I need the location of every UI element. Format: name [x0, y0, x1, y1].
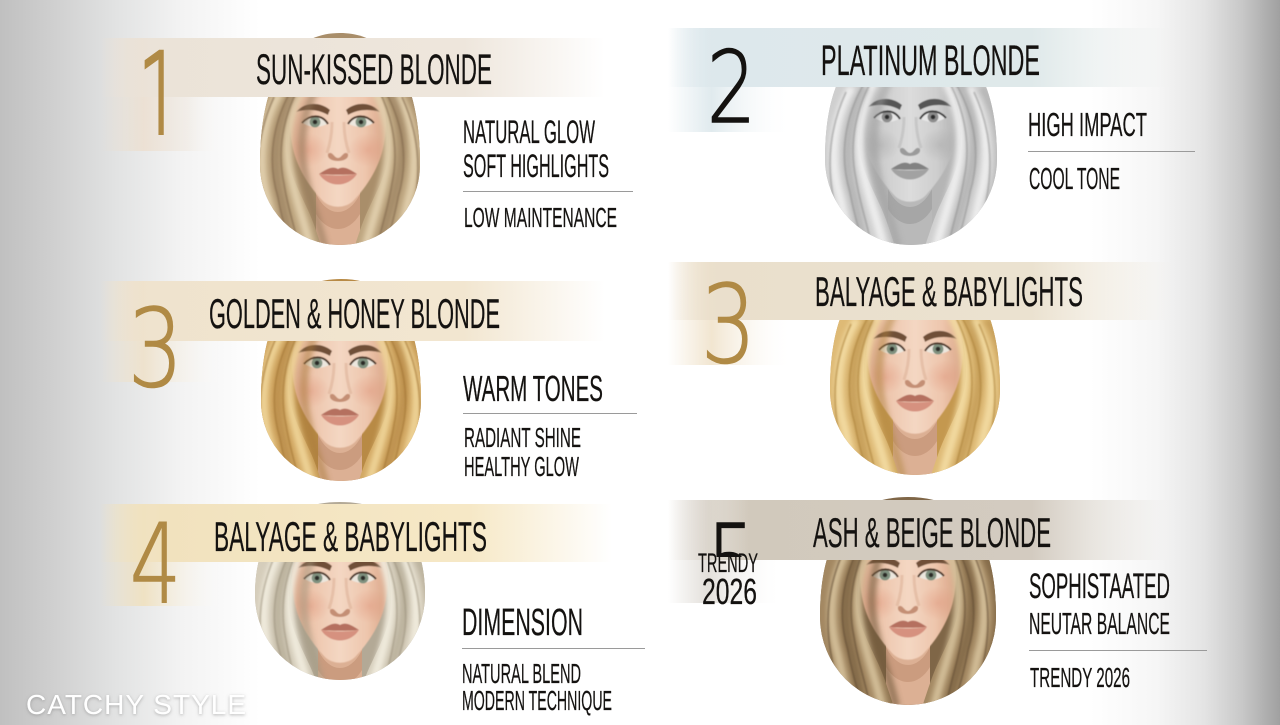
number 5: 5 — [707, 501, 757, 629]
number backdrop 3 — [100, 281, 225, 382]
panel: sun-kissed blonde — [100, 28, 633, 254]
banner — [668, 262, 1173, 320]
feature text: DIMENSION — [462, 602, 583, 644]
number backdrop 2 — [668, 28, 793, 132]
number 1: 1 — [138, 28, 182, 172]
banner — [668, 500, 1173, 560]
heading: GOLDEN & HONEY BLONDE — [209, 290, 500, 337]
feature text — [463, 368, 637, 482]
feature text: COOL TONE — [1029, 161, 1120, 196]
heading: PLATINUM BLONDE — [821, 37, 1040, 85]
feature text: HIGH IMPACT — [1028, 106, 1147, 143]
number 3: 3 — [128, 287, 183, 412]
number 2: 2 — [707, 31, 756, 146]
trendy overlay label: TRENDY — [698, 548, 758, 578]
feature text — [462, 602, 645, 716]
banner — [100, 281, 605, 341]
feature text: LOW MAINTENANCE — [464, 202, 617, 233]
number 4: 4 — [130, 500, 181, 628]
feature text: TRENDY 2026 — [1030, 662, 1130, 693]
heading: BALYAGE & BABYLIGHTS — [214, 513, 487, 560]
number 3 right: 3 — [701, 263, 756, 388]
feature text: NATURAL BLEND — [462, 658, 581, 689]
feature text: RADIANT SHINE — [464, 422, 581, 453]
number backdrop 4 — [100, 504, 225, 606]
banner — [100, 38, 605, 97]
feature text: HEALTHY GLOW — [464, 451, 579, 482]
panel: platinum blonde — [668, 28, 1195, 250]
banner — [668, 28, 1173, 87]
panel: balyage and babylights right — [672, 262, 1142, 475]
feature text: WARM TONES — [463, 368, 603, 409]
portrait: balyage platinum beige — [255, 502, 425, 680]
number backdrop 1 — [100, 38, 225, 151]
feature text: SOFT HIGHLIGHTS — [463, 148, 609, 184]
trendy overlay label — [698, 548, 758, 612]
panel: golden and honey blonde — [100, 275, 637, 495]
portrait: sun-kissed blonde — [260, 33, 420, 245]
portrait: balyage wavy — [830, 320, 1000, 475]
feature text: MODERN TECHNIQUE — [462, 685, 612, 716]
trendy overlay label: 2026 — [702, 571, 757, 612]
feature text — [1029, 567, 1207, 693]
portrait: golden and honey blonde — [261, 279, 421, 481]
banner — [100, 504, 612, 562]
feature text — [1028, 106, 1195, 196]
heading: ASH & BEIGE BLONDE — [813, 509, 1051, 556]
portrait: platinum blonde — [825, 87, 997, 245]
portrait: ash and beige blonde — [820, 497, 996, 705]
panel: balyage and babylights left — [100, 500, 645, 716]
panel: ash and beige blonde — [668, 495, 1207, 710]
watermark: CATCHY STYLE — [26, 689, 246, 720]
feature text — [463, 114, 633, 233]
number backdrop 3 right — [668, 262, 793, 365]
heading: SUN-KISSED BLONDE — [256, 46, 492, 94]
feature text: NATURAL GLOW — [463, 114, 595, 150]
number backdrop 5 — [668, 500, 783, 603]
